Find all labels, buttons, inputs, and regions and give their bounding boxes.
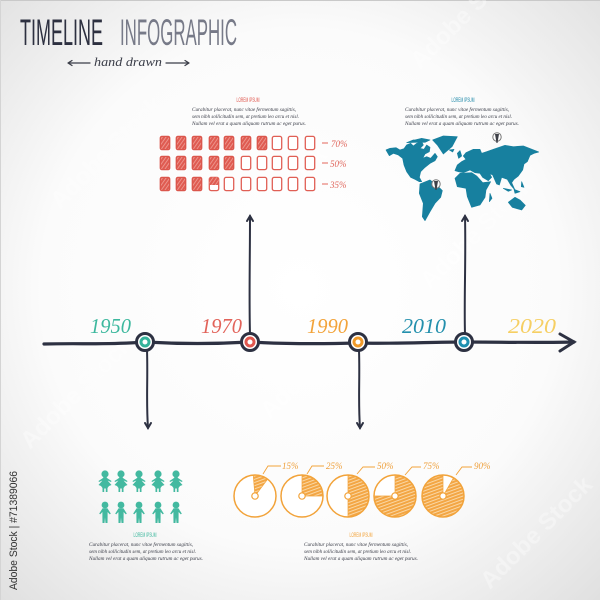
text block: pie block: Curabitur placerat, nunc vitae fermentum sagittis, <box>304 541 409 548</box>
text block: pie block <box>303 541 418 562</box>
node: 1950 <box>136 334 154 350</box>
arrow: 2010 up <box>462 216 468 334</box>
heading: red block: LOREM IPSUM <box>236 98 260 104</box>
icons: bottom row figures <box>99 502 182 523</box>
title: TIMELINE <box>20 12 103 53</box>
panel: world map <box>386 98 539 221</box>
heading: pie block: LOREM IPSUM <box>350 533 372 539</box>
text block: people block <box>88 541 203 562</box>
text block: red block: Nullam vel erat a quam aliquam rutrum ac eget purus. <box>191 121 306 127</box>
text block: people block: Nullam vel erat a quam aliquam rutrum ac eget purus. <box>88 556 203 562</box>
pie 15%: 15% <box>282 461 298 471</box>
pie 90%: 90% <box>474 461 490 471</box>
pie 25%: 25% <box>326 461 342 471</box>
panel: pie charts <box>234 461 490 562</box>
text block: people block: sem nibh sollicitudin sem, at pretium leo arcu et nisl. <box>89 549 196 555</box>
arrow: 1990 down <box>357 350 363 428</box>
arrow: 1970 up <box>247 216 253 334</box>
pie 90% <box>422 461 490 517</box>
text: INFOGRAPHIC <box>120 12 237 53</box>
heading: people block: LOREM IPSUM <box>134 533 156 539</box>
watermark pattern: Adobe Stock <box>15 331 138 454</box>
map pins <box>432 133 501 190</box>
year 1990: 1990 <box>307 314 348 338</box>
text block: map block: Nullam vel erat a quam aliquam rutrum ac eget purus. <box>404 121 519 127</box>
text block: red block: Curabitur placerat, nunc vitae fermentum sagittis, <box>192 106 297 113</box>
stock credit: Adobe Stock | #71389066 <box>8 471 20 590</box>
watermark pattern: Adobe Stock <box>210 141 333 264</box>
row 70%: 70% <box>331 139 348 149</box>
pie 50%: 50% <box>377 461 394 471</box>
text block: red block <box>191 106 306 127</box>
icons: top row figures <box>98 470 182 492</box>
watermark pattern: Adobe Stock <box>415 171 538 294</box>
subtitle: hand drawn <box>68 54 189 69</box>
pie 75% <box>374 461 440 517</box>
node: 1990 <box>350 334 366 350</box>
text block: pie block: Nullam vel erat a quam aliquam rutrum ac eget purus. <box>303 556 418 562</box>
text block: pie block: sem nibh sollicitudin sem, at pretium leo arcu et nisl. <box>304 549 411 555</box>
row 35% <box>160 177 346 191</box>
row 35%: 35% <box>329 180 346 190</box>
arrow: 1950 down <box>145 350 151 428</box>
year 2020: 2020 <box>508 314 557 338</box>
row 50% <box>160 156 346 170</box>
year 1950: 1950 <box>90 314 131 338</box>
node: 2010 <box>456 334 472 350</box>
text block: map block: Curabitur placerat, nunc vitae fermentum sagittis, <box>405 106 510 113</box>
heading: map block: LOREM IPSUM <box>452 98 474 104</box>
row 50%: 50% <box>330 159 346 169</box>
text block: people block: Curabitur placerat, nunc vitae fermentum sagittis, <box>89 541 194 548</box>
panel: percent bars <box>160 98 348 191</box>
text block: map block <box>404 106 519 127</box>
panel: people <box>88 470 203 562</box>
row 70% <box>160 136 348 150</box>
watermark pattern: Adobe Stock <box>255 301 378 424</box>
year 2010: 2010 <box>402 314 447 338</box>
subtitle: hand drawn: hand drawn <box>94 54 162 69</box>
node: 1970 <box>242 334 258 350</box>
timeline axis <box>44 334 574 351</box>
pie 75%: 75% <box>423 461 440 471</box>
watermark pattern: Adobe Stock <box>475 471 598 594</box>
watermark pattern: Adobe Stock <box>45 91 168 214</box>
pie 15% <box>234 461 298 517</box>
pie 25% <box>281 461 342 517</box>
map continents <box>386 136 539 221</box>
year 1970: 1970 <box>201 314 242 338</box>
pie 50% <box>327 461 394 517</box>
text block: map block: sem nibh sollicitudin sem, at pretium leo arcu et nisl. <box>405 114 512 120</box>
text block: red block: sem nibh sollicitudin sem, at pretium leo arcu et nisl. <box>192 114 299 120</box>
